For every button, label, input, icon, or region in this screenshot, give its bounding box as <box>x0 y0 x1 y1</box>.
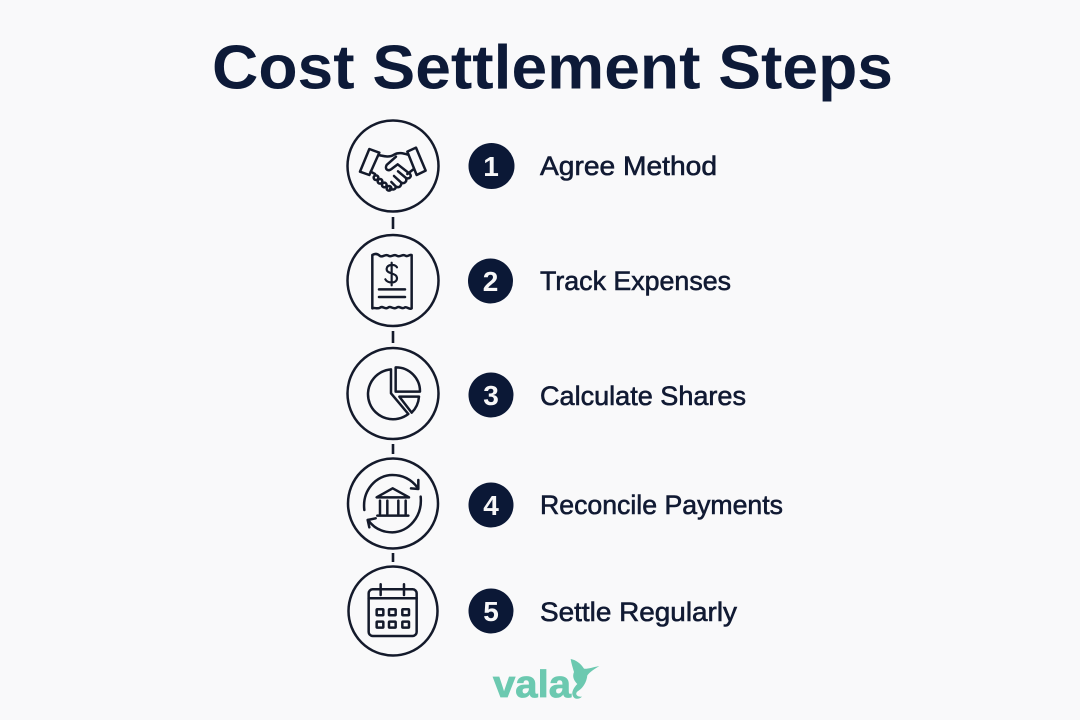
icon: hummingbird <box>571 659 599 699</box>
number badge 3 <box>468 372 514 418</box>
logo: vala <box>493 659 599 706</box>
icon: receipt <box>348 235 438 326</box>
number badge 3: 3 <box>483 380 499 411</box>
label: agree method: Agree Method <box>540 151 717 181</box>
step 3: calculate shares <box>348 348 746 439</box>
number badge 4: 4 <box>483 490 499 521</box>
icon: handshake <box>348 120 438 212</box>
number badge 2 <box>468 258 513 304</box>
number badge 4 <box>468 482 514 528</box>
label: reconcile payments: Reconcile Payments <box>540 490 783 520</box>
step 4: reconcile payments <box>348 458 783 548</box>
step 1: agree method <box>348 120 717 212</box>
number badge 5 <box>468 588 514 634</box>
label: settle regularly: Settle Regularly <box>540 597 738 627</box>
step 5: settle regularly <box>348 566 738 656</box>
logo: vala: vala <box>493 664 572 706</box>
step 2: track expenses <box>348 235 731 326</box>
label: track expenses: Track Expenses <box>540 266 731 296</box>
number badge 2: 2 <box>483 266 498 297</box>
icon: pie chart <box>348 348 438 439</box>
number badge 1: 1 <box>483 151 499 182</box>
label: calculate shares: Calculate Shares <box>540 381 746 411</box>
number badge 1 <box>468 143 514 189</box>
title: Cost Settlement Steps <box>212 34 893 102</box>
icon: calendar <box>348 566 438 656</box>
number badge 5: 5 <box>483 596 499 627</box>
icon: bank with cycle arrows <box>348 458 438 548</box>
